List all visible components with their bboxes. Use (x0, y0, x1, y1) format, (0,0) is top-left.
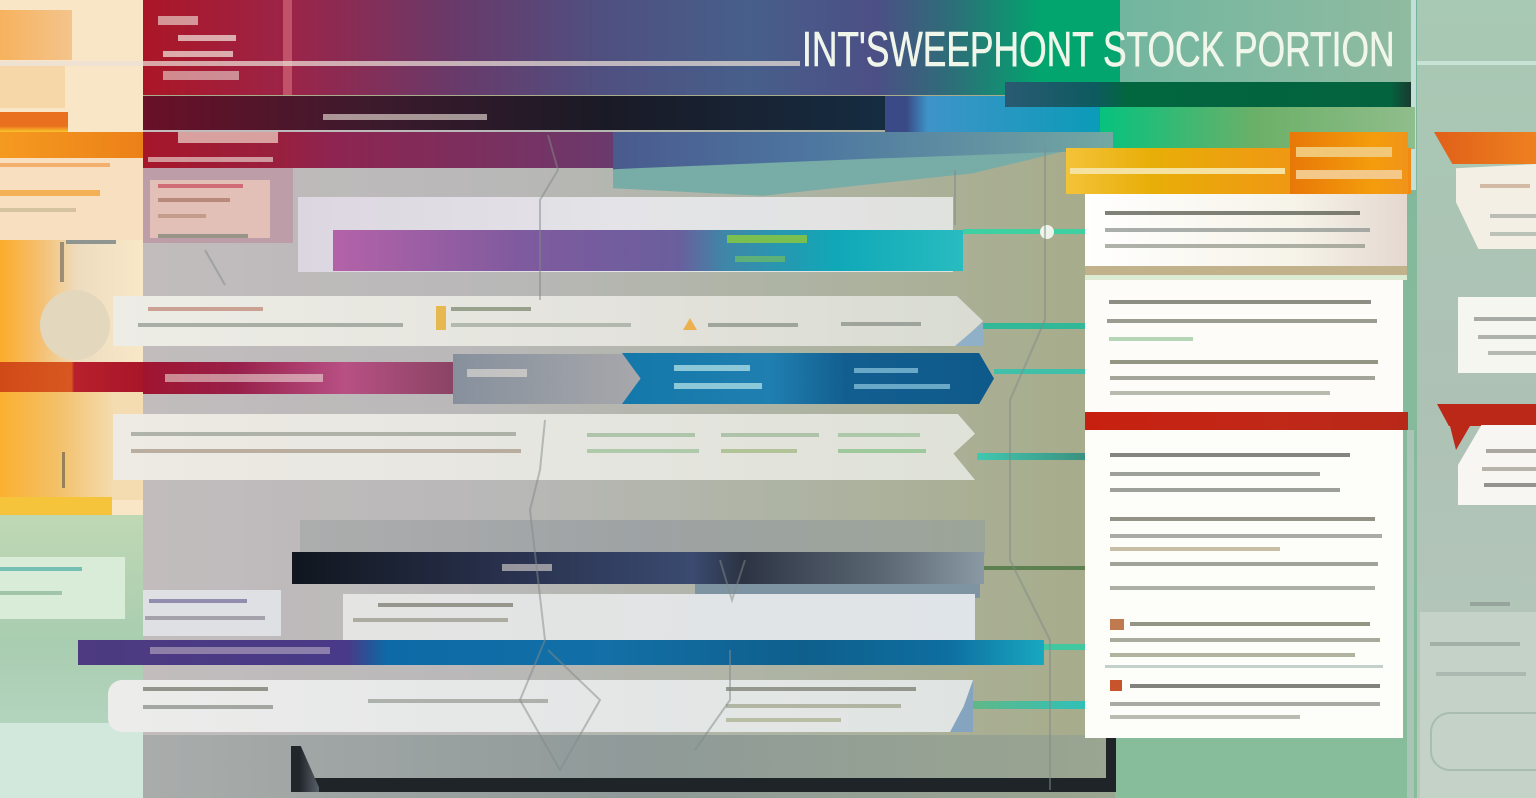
far right: red wedge (1450, 426, 1470, 450)
bottom card text left (143, 687, 273, 709)
teal connector 6 (973, 701, 1085, 709)
panel 3 divider (1105, 665, 1383, 668)
panel 3 bullet two (1110, 680, 1380, 719)
tan strip under panel 1 (1085, 266, 1407, 280)
right panel 1 (1085, 194, 1407, 266)
background: central area (143, 130, 1123, 798)
top band: label lines (158, 16, 239, 80)
dark header label (323, 114, 487, 120)
left column: green lower area (0, 515, 143, 798)
row 2 blue text 1 (674, 365, 762, 389)
orange tab (1290, 132, 1408, 194)
background: right column (1115, 0, 1417, 798)
vertical rule right lower (1407, 430, 1414, 798)
white card back (298, 197, 953, 272)
yellow header line (1070, 168, 1285, 174)
dark row bar (292, 552, 984, 584)
row 2 blue segment (622, 353, 994, 404)
left column: orange strip (0, 112, 68, 132)
green glow (1100, 107, 1415, 149)
teal connector 3 (994, 369, 1085, 374)
slate wedge (613, 132, 1113, 170)
dark header bar (143, 96, 913, 130)
bottom dark bracket (291, 778, 1116, 792)
row 3 text left (131, 432, 521, 453)
row 1 text block right (708, 323, 798, 327)
row 2 grey segment (453, 354, 643, 404)
bottom card text right (726, 687, 916, 722)
row 2 grey label (467, 369, 527, 377)
far right: cream callout 1 (1456, 164, 1536, 249)
left column: small peach block (0, 66, 65, 108)
olive connector (984, 566, 1085, 570)
panel 3 bullet one (1110, 619, 1380, 657)
far right: red ribbon (1437, 404, 1536, 426)
left column: yellow strip (0, 497, 112, 515)
bracket left stroke (291, 746, 319, 792)
panel 3 heading text (1110, 453, 1350, 492)
right panel 2 (1085, 280, 1403, 412)
row 2 red band (143, 362, 453, 394)
background: bottom central band (143, 735, 1123, 798)
background: pink tint behind note (143, 168, 293, 243)
dark row lower wedge (695, 584, 980, 598)
far right: orange ribbon (1434, 132, 1536, 164)
far right: white card 2 (1458, 425, 1536, 505)
row 2 blue text 2 (854, 368, 950, 389)
panel 1 text lines (1105, 211, 1370, 248)
bracket right stroke (1106, 738, 1116, 792)
yellow-orange right header (1066, 148, 1411, 194)
row 1 tail (955, 322, 983, 346)
vertical rule right (1411, 0, 1416, 190)
blue band label (150, 647, 330, 654)
left column: pale note (0, 557, 125, 619)
row 3 text column 1 (587, 433, 699, 453)
row 1 icon triangle (683, 318, 697, 330)
teal haze under wedge (613, 152, 1062, 196)
panel 2 text group 1 (1107, 300, 1377, 341)
orange tab line 2 (1296, 170, 1402, 179)
left column: yellow panel (0, 392, 143, 500)
connector node (1040, 225, 1054, 239)
teal connector 1 (963, 229, 1085, 234)
row 2 label (165, 374, 323, 382)
far right: white card (1458, 297, 1536, 373)
teal connector 4 (977, 453, 1085, 460)
far right rule (1417, 61, 1536, 65)
small white note (143, 590, 281, 636)
wide light card (343, 594, 975, 640)
left column: top orange blob (0, 10, 72, 60)
bottom row card (108, 680, 973, 732)
dark green bar (1005, 82, 1411, 107)
row 3 text column 3 (838, 433, 926, 453)
dark row label (502, 564, 552, 571)
bottom card tail (950, 680, 973, 732)
row 1 icon square (436, 306, 446, 330)
left column: orange bar (0, 132, 143, 158)
panel 3 body text (1110, 517, 1382, 590)
left column: yellow-orange gradient panel (0, 240, 143, 362)
background: far right column (1417, 0, 1536, 798)
left column: cream panel (0, 158, 143, 240)
row 3 text column 2 (721, 433, 819, 453)
top band: vertical accent (283, 0, 292, 95)
wide card label (353, 603, 513, 622)
red divider (1085, 412, 1408, 430)
title: INT'SWEEPHONT STOCK PORTION (802, 23, 1395, 77)
row 1 card (113, 296, 983, 346)
left column: bottom pale note (0, 723, 143, 798)
teal connector 5 (1044, 644, 1085, 650)
background: grey shade band (300, 520, 985, 555)
horizontal rule across top (0, 61, 800, 66)
row 1 text block left (138, 307, 403, 327)
row 3 card (113, 414, 975, 480)
right panel 3 (1085, 430, 1403, 738)
crimson band peach fragment (178, 132, 278, 143)
blue extension of dark bar (885, 96, 1100, 132)
crimson band label (148, 157, 273, 162)
row 1 text block middle (451, 307, 631, 327)
row 1 text end (841, 322, 921, 326)
blue band (78, 640, 1044, 665)
orange tab lines (1296, 147, 1392, 157)
purple-teal bar labels (727, 235, 807, 262)
top band: right green extension (1120, 0, 1415, 82)
teal connector 2 (983, 323, 1085, 329)
panel 2 text group 2 (1110, 360, 1378, 395)
far right: lower pale card (1420, 612, 1536, 798)
crimson band 2 (143, 132, 613, 168)
background: left column (0, 0, 143, 798)
left column: red bar (0, 362, 143, 392)
purple-teal bar (333, 230, 963, 271)
pink note (150, 180, 270, 238)
top band (143, 0, 1120, 95)
bottom card text middle (368, 699, 548, 703)
